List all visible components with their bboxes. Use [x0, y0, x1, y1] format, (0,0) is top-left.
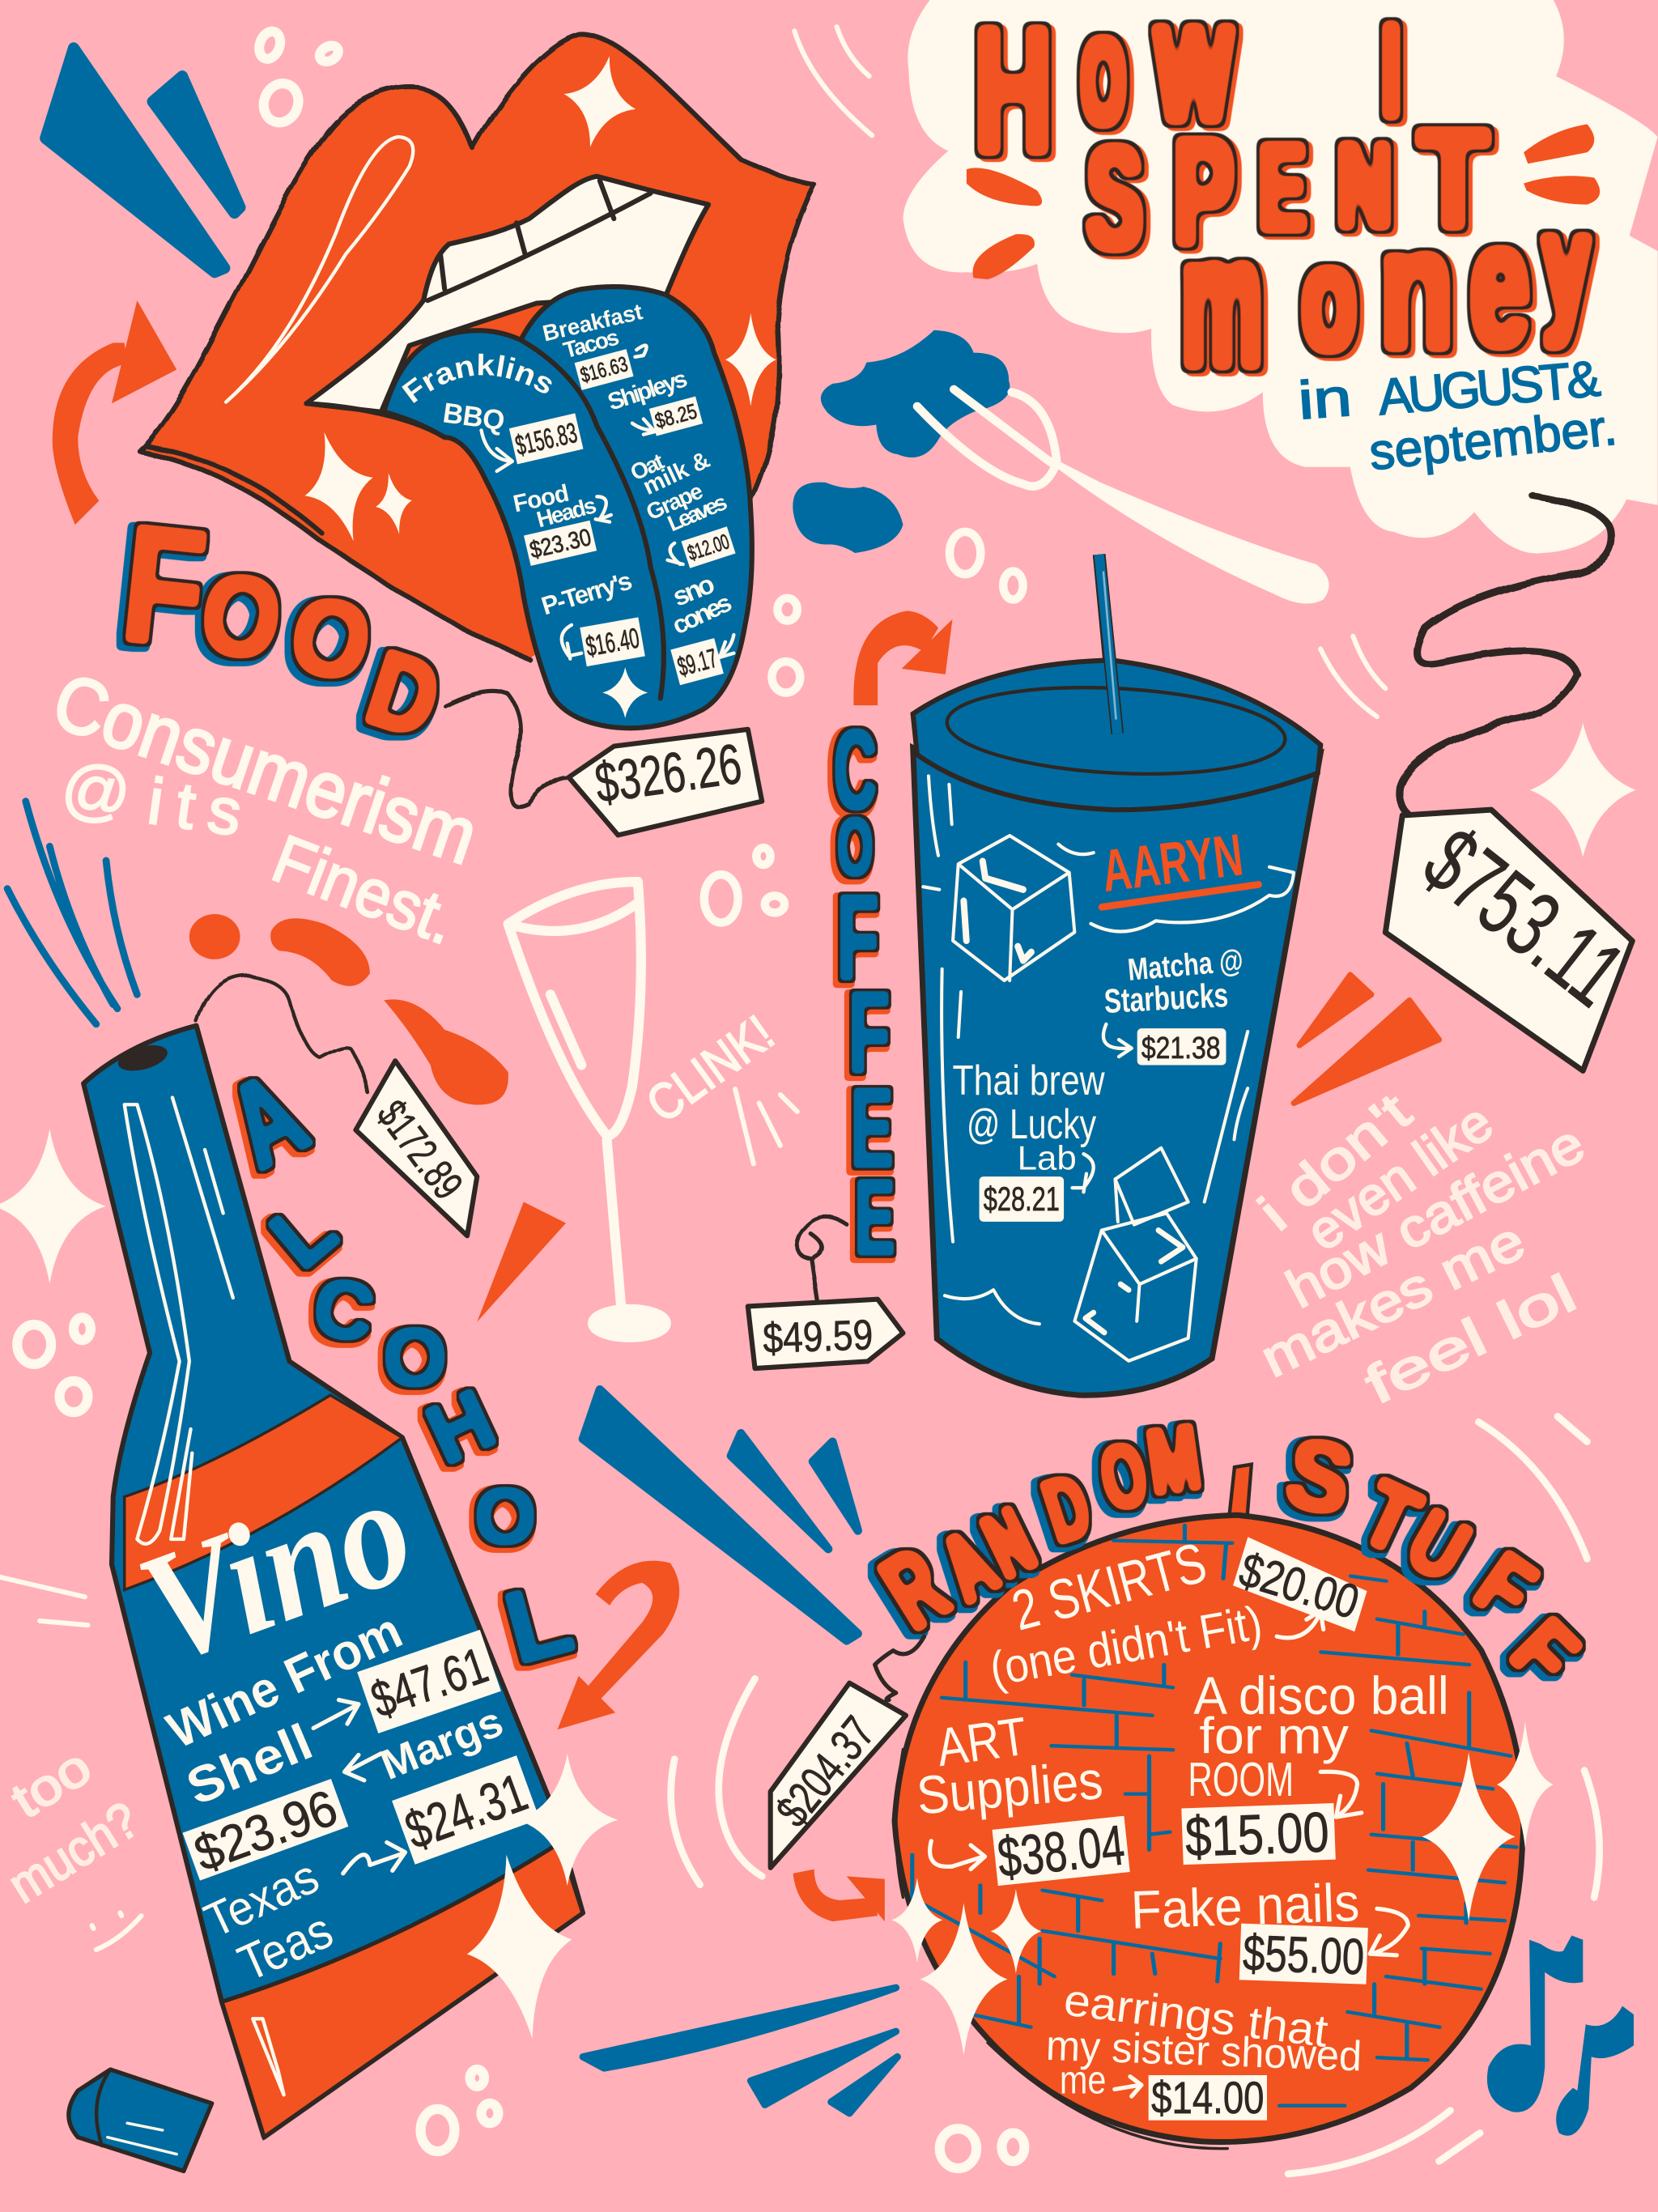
sparkles [892, 1721, 1554, 2056]
caption: caffeine note: makes me [1252, 1210, 1534, 1389]
ball price tags: $15.00 [1184, 1800, 1330, 1869]
sparkle [1530, 723, 1636, 857]
heading: COFFEE: C [834, 706, 876, 832]
sparkles on bottle [454, 1754, 619, 2046]
subtitle: AUGUST& [1376, 350, 1603, 426]
cup items: $21.38 [1141, 1031, 1221, 1066]
string to total tag [1399, 496, 1612, 815]
lid ellipse [945, 679, 1287, 782]
panel: food [43, 32, 816, 959]
ball item labels: (one didn't Fit) [986, 1595, 1266, 1696]
cup scribbles and ice cubes [923, 776, 1294, 1361]
lips [140, 34, 814, 659]
bottle items [159, 1602, 540, 1993]
orange arrow [53, 300, 176, 525]
cup name AARYN [1099, 821, 1259, 907]
cup items: Thai brew [952, 1057, 1105, 1104]
bottle shape [83, 1026, 583, 2138]
sparkles on lips [290, 49, 776, 718]
tongue arrows [482, 346, 733, 659]
heading: COFFEE: F [837, 869, 878, 1005]
CLINK caption: CLINK! [636, 1005, 784, 1134]
heading: RANDOM STUFF: S [1277, 1416, 1361, 1537]
title letters: n [1379, 190, 1454, 386]
caption: consumerism: @ [58, 749, 134, 832]
bubbles near glass [704, 848, 784, 922]
price string [875, 1636, 925, 1700]
heading: FOOD [115, 490, 453, 762]
tongue item labels: cones [668, 588, 736, 640]
teeth [306, 177, 708, 412]
tongue price tags [509, 349, 736, 685]
tongue item labels: Shipleys [605, 365, 691, 416]
heading: RANDOM STUFF: D [1032, 1453, 1102, 1563]
bubbles left [17, 1317, 91, 1412]
subtitle: september. [1367, 398, 1619, 481]
ball item labels [914, 1530, 1449, 2103]
heading: ALCOHOL: L [253, 1180, 354, 1287]
bottle items: Margs [374, 1698, 509, 1789]
string [197, 975, 367, 1092]
bottle lower band [222, 1843, 583, 2138]
panel: coffee [0, 496, 1643, 2174]
bottle items: Wine From [159, 1602, 410, 1759]
title letters: E [1259, 118, 1307, 257]
tongue item labels: Heads [534, 492, 599, 532]
caption: caffeine note: how caffeine [1277, 1113, 1594, 1320]
bottle items: Shell [179, 1713, 321, 1816]
caption: too much: much? [0, 1791, 148, 1914]
music notes [1487, 1935, 1634, 2136]
heading: COFFEE: O [837, 802, 873, 892]
orange triangles [1294, 975, 1439, 1104]
ball price tags: $38.04 [995, 1813, 1128, 1889]
ball price tags: $14.00 [1151, 2073, 1265, 2123]
lip highlight [226, 137, 413, 402]
title letters: y [1542, 179, 1590, 349]
orange arrow [793, 1870, 885, 1921]
tongue item labels: Grape [642, 478, 707, 525]
fork loop [917, 389, 1056, 487]
heading: RANDOM STUFF: U [1392, 1490, 1486, 1601]
ball item labels: me [1060, 2059, 1106, 2103]
title letters: P [1173, 107, 1234, 276]
decorative cream flicks [794, 27, 1385, 717]
tongue item labels: milk & [639, 446, 714, 500]
price string [797, 1217, 847, 1305]
title letters: S [1086, 117, 1143, 280]
tongue price tags: $23.30 [527, 524, 593, 564]
panel: alcohol [0, 802, 1024, 2171]
heading: RANDOM STUFF: T [1346, 1459, 1435, 1575]
heading: RANDOM STUFF: M [1141, 1404, 1206, 1515]
title letters: N [1337, 117, 1392, 253]
caption: caffeine note: i don't [1248, 1082, 1422, 1242]
subtitle: in [1296, 368, 1354, 431]
disco ball [895, 1515, 1524, 2142]
panel: random stuff [767, 1404, 1634, 2149]
heading: FOOD: F [115, 490, 214, 683]
cup items [952, 943, 1244, 1222]
heading: COFFEE: F [848, 968, 890, 1097]
fork scribble with blue blobs [793, 330, 1329, 604]
blue lines [7, 802, 137, 1024]
tongue item labels: Breakfast [540, 299, 645, 346]
heading: RANDOM STUFF: A [924, 1509, 1013, 1623]
title letters: W [1154, 0, 1233, 151]
blue blob small [793, 483, 903, 553]
heading: RANDOM STUFF: R [863, 1525, 967, 1652]
tongue item labels [402, 299, 736, 640]
heading: RANDOM STUFF: F [1459, 1534, 1552, 1640]
heading: FOOD: O [279, 571, 383, 706]
orange arrow [558, 1561, 679, 1729]
heading: ALCOHOL: O [474, 1472, 536, 1560]
heading: ALCOHOL: A [207, 1045, 327, 1194]
heading: RANDOM STUFF: F [1494, 1600, 1596, 1704]
title letters: O [1081, 13, 1125, 151]
title letters: o [1301, 212, 1357, 382]
caption: caffeine note [1248, 1082, 1594, 1416]
tongue [384, 287, 752, 728]
caption: consumerism: Consumerism [43, 656, 488, 881]
heading: RANDOM STUFF: N [968, 1487, 1049, 1598]
title letters: m [1181, 194, 1263, 408]
ball item labels: A disco ball [1193, 1666, 1449, 1726]
ornament stem [1229, 1465, 1252, 1520]
bubbles near cup [772, 532, 1023, 692]
tongue item labels: sno [669, 569, 719, 613]
cup items: Starbucks [1103, 976, 1229, 1020]
price tag: alcohol total [355, 1061, 477, 1236]
ball item labels: ART [933, 1706, 1031, 1778]
brick lines [912, 1525, 1516, 2106]
title letters: T [1417, 100, 1490, 257]
caption: too much: too [2, 1738, 101, 1830]
cork [69, 2069, 212, 2171]
ball price tags: $20.00 [1234, 1542, 1365, 1629]
bottle glare [125, 1098, 284, 2095]
price tag: alcohol total: $172.89 [368, 1092, 471, 1208]
cup items: $28.21 [984, 1180, 1060, 1218]
inner lower lip edge [306, 403, 444, 437]
cup items: Lab [1018, 1138, 1077, 1176]
ball item labels: Fake nails [1130, 1873, 1360, 1941]
lips outline [140, 34, 814, 659]
straw [1099, 555, 1116, 734]
tongue item labels: P-Terry's [538, 566, 636, 620]
tongue price tags: $156.83 [512, 417, 580, 462]
tongue item labels: Tacos [561, 324, 622, 363]
tongue price tags: $8.25 [653, 398, 699, 433]
price tag: random total: $204.37 [767, 1708, 885, 1836]
title letters [974, 0, 1590, 408]
tongue price tags: $12.00 [684, 529, 732, 565]
bottle upper band [125, 1395, 402, 1590]
cream arcs [671, 1416, 1600, 2174]
ball price tags: $55.00 [1242, 1925, 1365, 1985]
title letters: e [1469, 183, 1530, 384]
price tag: coffee total: $49.59 [762, 1312, 874, 1363]
heading: ALCOHOL: L [494, 1559, 583, 1686]
fork [1045, 454, 1329, 604]
tooth lines [427, 181, 651, 300]
bottle items: $24.31 [397, 1763, 535, 1861]
tongue item labels: BBQ [441, 397, 507, 437]
subtitle [1296, 350, 1619, 481]
orange blobs [189, 914, 566, 1322]
ball item labels: Supplies [914, 1750, 1105, 1827]
bottle items: $47.61 [364, 1637, 495, 1729]
tongue centre line [521, 340, 664, 698]
tongue item labels: Food [511, 480, 572, 517]
caption: consumerism: Finest. [263, 820, 467, 959]
cup name AARYN: AARYN [1099, 821, 1247, 904]
cloud behind title [903, 0, 1658, 553]
bubbles top-left [256, 28, 341, 127]
price tag: coffee total [748, 1300, 903, 1368]
sparkle left [0, 1129, 106, 1284]
ball outline double [896, 1750, 1227, 2149]
heading: FOOD: O [192, 547, 291, 685]
tongue price tags: $9.17 [674, 644, 721, 683]
tongue item labels: Franklins [402, 353, 552, 403]
caption: too much [0, 1738, 148, 1950]
blue wedges centre [583, 1389, 858, 1640]
ball price tags [992, 1537, 1372, 2123]
heading: COFFEE: E [855, 1157, 895, 1277]
tongue item labels: Leaves [664, 489, 731, 536]
heading: ALCOHOL [207, 1045, 583, 1686]
heading: FOOD: D [354, 628, 453, 762]
blue wedges bottom [583, 1988, 898, 2113]
cup items: Matcha @ [1126, 943, 1244, 988]
title accent dashes [967, 124, 1600, 279]
bottle items: $23.96 [187, 1779, 345, 1882]
bottle items: Teas [230, 1902, 341, 1993]
blue blob large [821, 330, 1010, 457]
bubbles bottom [421, 2069, 1024, 2168]
heading: RANDOM STUFF: O [1092, 1422, 1155, 1530]
straw over lid [1099, 555, 1117, 734]
bottle mouth [115, 1040, 170, 1075]
ball arrows [930, 1611, 1408, 2096]
heading: ALCOHOL: C [307, 1261, 380, 1360]
cup items: @ Lucky [967, 1101, 1097, 1148]
caption: caffeine note: even like [1296, 1092, 1503, 1262]
ball item labels: earrings that [1061, 1974, 1331, 2057]
title: How I Spent Money [967, 0, 1600, 408]
heading: ALCOHOL: O [383, 1312, 447, 1403]
heading: COFFEE: E [851, 1065, 893, 1191]
heading: COFFEE [834, 706, 895, 1277]
champagne glass [508, 882, 666, 1338]
left cream flicks [0, 1577, 87, 1625]
heading: ALCOHOL: H [413, 1371, 508, 1482]
burst: top-left blue wedges [45, 48, 240, 272]
price string [444, 691, 569, 807]
ball item labels: 2 SKIRTS [1005, 1530, 1213, 1643]
cup body [913, 747, 1320, 1395]
tongue item labels: Oat [627, 449, 668, 486]
tongue price tags: $16.40 [584, 623, 642, 662]
bottle items: Texas [196, 1848, 326, 1948]
ball item labels: my sister showed [1045, 2023, 1363, 2080]
tongue price tags: $16.63 [578, 351, 631, 387]
ball item labels: for my [1199, 1708, 1350, 1765]
cup lid [913, 660, 1320, 810]
heading: RANDOM STUFF [863, 1404, 1596, 1704]
price tag: food total: $326.26 [591, 732, 746, 815]
caption: consumerism: its [143, 764, 246, 849]
ball item labels: ROOM [1188, 1752, 1294, 1806]
caption: caffeine note: feel lol [1356, 1263, 1585, 1416]
price tag: food total [569, 730, 762, 835]
Vino script: Vino [119, 1440, 433, 1697]
orange arrow [853, 610, 952, 705]
